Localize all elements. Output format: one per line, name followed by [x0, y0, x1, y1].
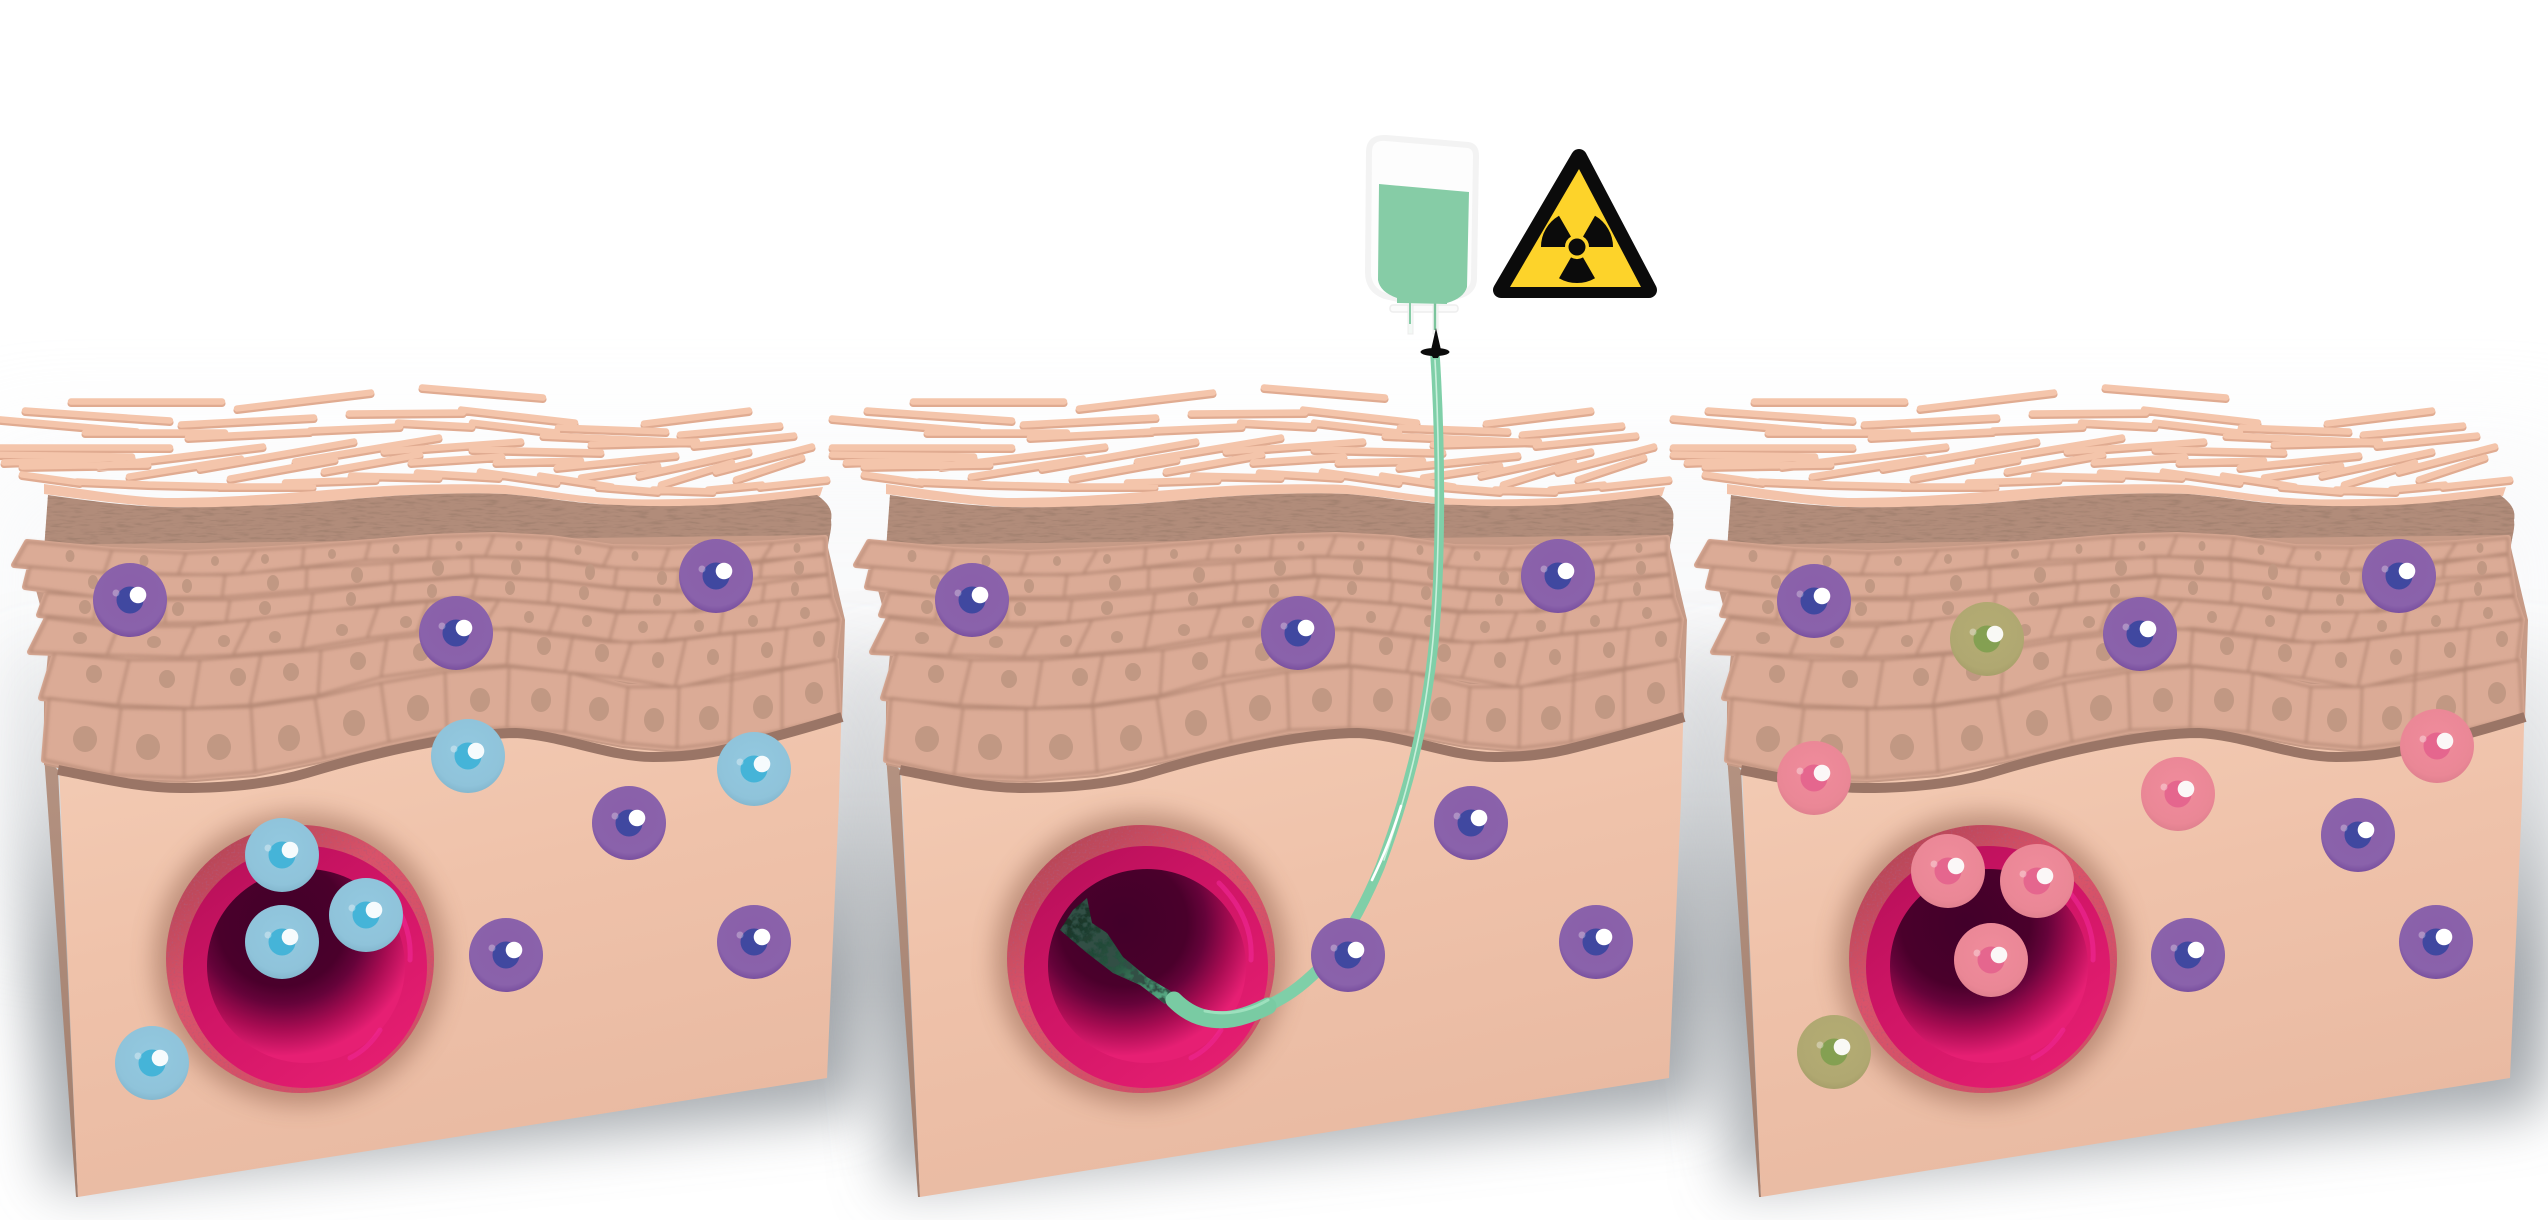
infusion tube [1174, 355, 1439, 1020]
icon: black drip connector [1420, 328, 1450, 358]
blood vessel [1837, 813, 2129, 1105]
skin tissue block [832, 388, 1687, 1197]
panel: skin with healthy and labelled cells before infusion [0, 388, 845, 1197]
icon: infusion bag with green fluid [1368, 138, 1476, 334]
blood vessel [154, 813, 446, 1105]
panel: skin after treatment with dying and cleared cells [1673, 388, 2528, 1197]
immune cells: purple [935, 539, 1633, 992]
damaged cells: olive [1797, 602, 2024, 1089]
panel: infusion into blood vessel [832, 355, 1687, 1197]
target cells: blue [115, 719, 791, 1100]
catheter tip inside vessel [1060, 898, 1172, 1004]
skin tissue block [1673, 388, 2528, 1197]
immune cells: purple [1777, 539, 2473, 992]
blood vessel [995, 813, 1287, 1105]
icon: radiation warning sign [1501, 157, 1649, 290]
immune cells: purple [93, 539, 791, 992]
skin tissue block [0, 388, 845, 1197]
treated cells: pink [1777, 709, 2474, 997]
